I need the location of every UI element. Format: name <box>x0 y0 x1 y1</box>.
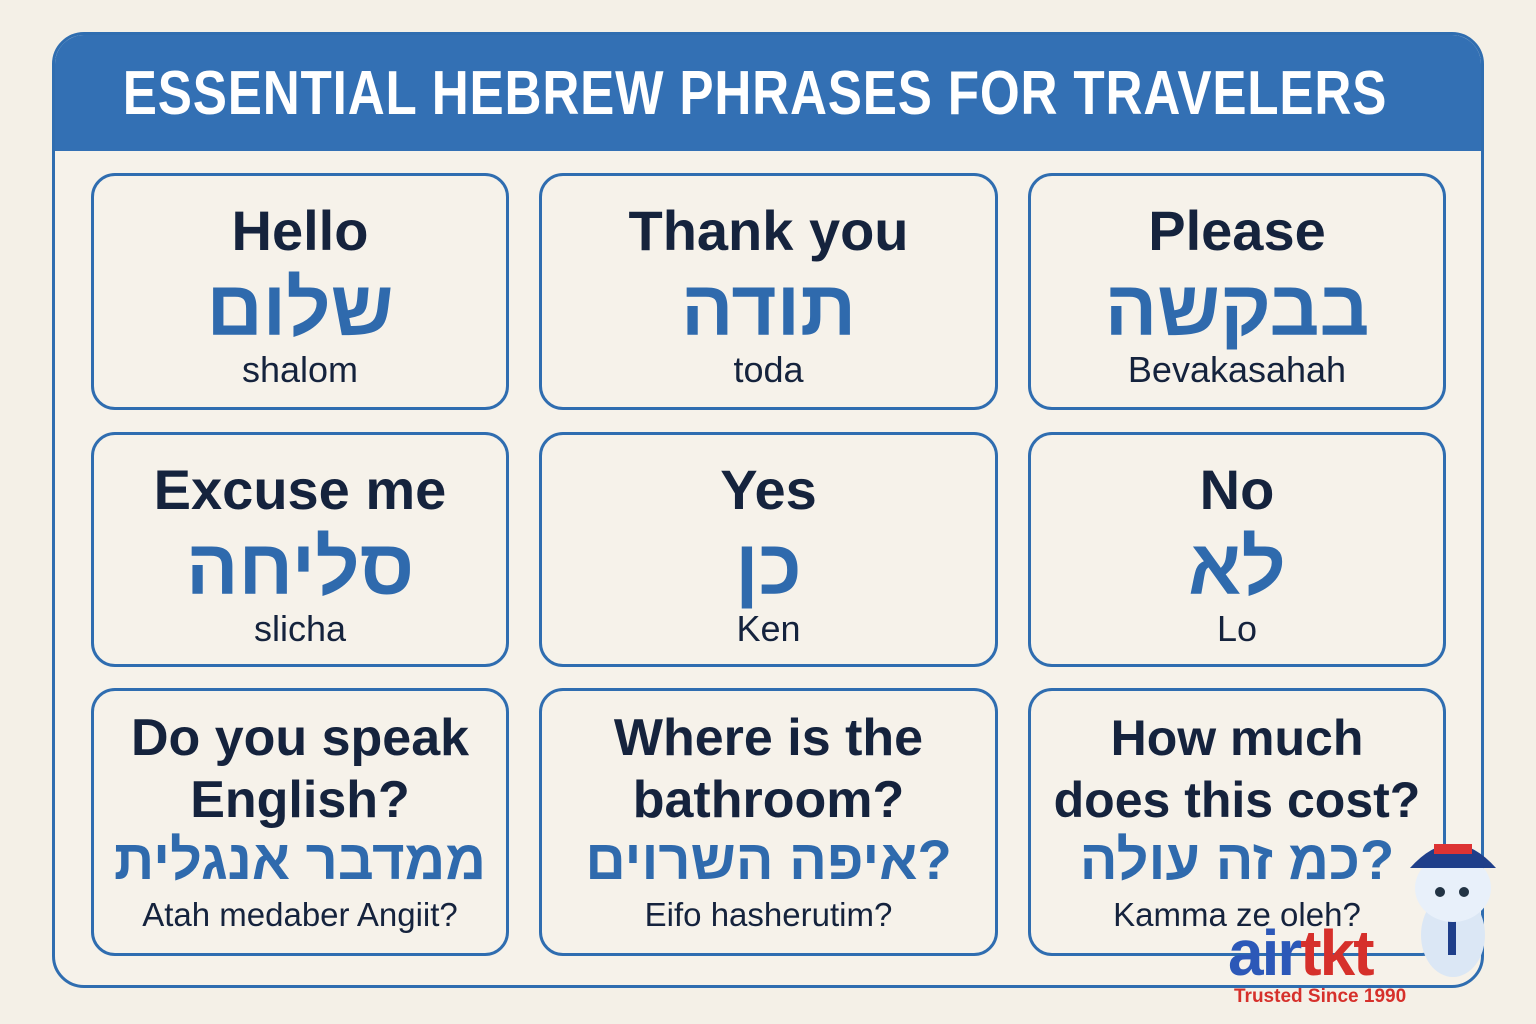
card: thank you <box>539 173 998 410</box>
card: excuse me: Excuse me <box>154 458 446 521</box>
card: hello: שלום <box>206 264 394 352</box>
card: excuse me <box>91 432 509 667</box>
card: no <box>1028 432 1446 667</box>
title: ESSENTIAL HEBREW PHRASES FOR TRAVELERS <box>123 59 1387 128</box>
card: cost: How much <box>1111 710 1363 766</box>
logo: airtkt mascot: Trusted Since 1990 <box>1234 986 1406 1007</box>
card: yes: Ken <box>736 608 801 649</box>
card: cost <box>1028 688 1446 956</box>
card: bathroom: bathroom? <box>633 771 904 829</box>
card: cost: Kamma ze oleh? <box>1113 896 1361 933</box>
card: please: Bevakasahah <box>1128 349 1346 390</box>
card: speak english <box>91 688 509 956</box>
card: please: בבקשה <box>1105 264 1369 352</box>
card: thank you: תודה <box>681 264 856 352</box>
header band <box>55 35 1481 151</box>
card: hello <box>91 173 509 410</box>
card: bathroom <box>539 688 998 956</box>
card: no: לא <box>1188 523 1286 611</box>
card: yes: Yes <box>720 458 817 521</box>
card: excuse me: slicha <box>254 608 346 649</box>
card: bathroom: איפה השרוים? <box>585 828 952 891</box>
card: speak english: Do you speak <box>131 709 469 767</box>
card: cost: כמ זה עולה? <box>1080 828 1394 891</box>
card: yes <box>539 432 998 667</box>
card: please: Please <box>1148 199 1326 262</box>
card: yes: כן <box>735 523 802 611</box>
card: bathroom: Where is the <box>614 709 923 767</box>
card: bathroom: Eifo hasherutim? <box>645 896 892 933</box>
card: speak english: Atah medaber Angiit? <box>142 896 458 933</box>
logo: airtkt mascot <box>1228 844 1496 1007</box>
card: hello: shalom <box>242 349 358 390</box>
card: excuse me: סליחה <box>186 523 414 611</box>
card: hello: Hello <box>232 199 368 262</box>
card: cost: does this cost? <box>1054 772 1420 828</box>
card: no: Lo <box>1217 608 1257 649</box>
icon: mascot <box>1410 844 1496 977</box>
brand text: airtkt <box>1228 917 1372 989</box>
card: please <box>1028 173 1446 410</box>
card: no: No <box>1200 458 1274 521</box>
card: speak english: ממדבר אנגלית <box>114 828 486 891</box>
card: thank you: Thank you <box>628 199 909 262</box>
card: thank you: toda <box>733 349 804 390</box>
card: speak english: English? <box>190 771 410 829</box>
